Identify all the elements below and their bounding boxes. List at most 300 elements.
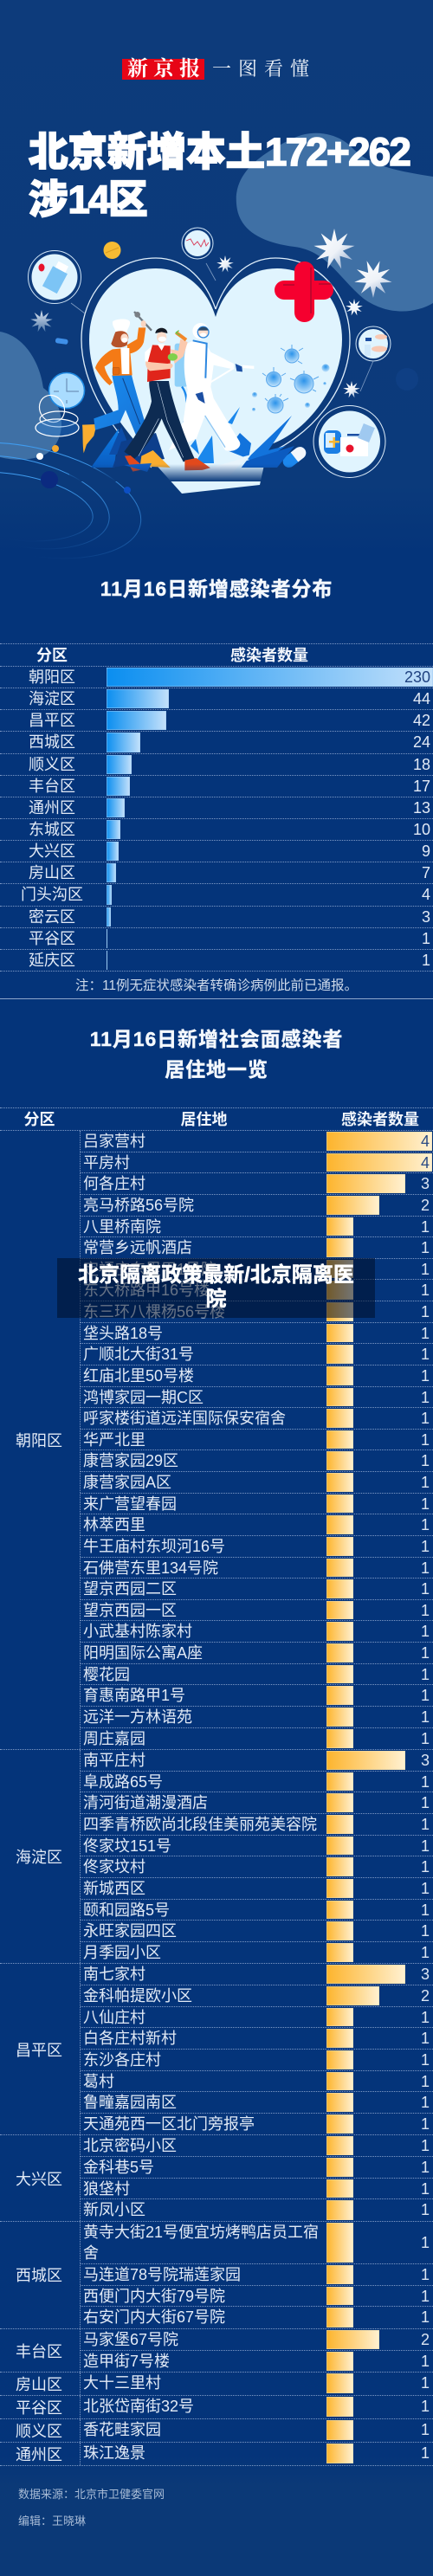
row: 马家堡67号院: 马家堡67号院	[83, 2331, 178, 2348]
orbit lines	[0, 423, 152, 578]
row: 马家堡67号院: 2	[421, 2331, 430, 2348]
connector line	[360, 361, 373, 391]
row: 顺义区: 18	[413, 756, 430, 773]
overlay title band	[57, 1258, 375, 1318]
row: 四季青桥欧尚北段佳美丽苑美容院	[81, 1814, 433, 1836]
row: 望京西园二区: 1	[421, 1580, 430, 1598]
row: 房山区	[0, 862, 433, 884]
row: 东城区	[0, 819, 433, 841]
row: 来广营望春园	[81, 1494, 433, 1514]
row: 亮马桥路56号院: 亮马桥路56号院	[83, 1197, 194, 1214]
row: 呼家楼街道远洋国际保安宿舍: 1	[421, 1410, 430, 1427]
row: 新城西区: 新城西区	[83, 1880, 145, 1897]
group: 海淀区: 海淀区	[16, 1849, 62, 1866]
row: 东城区: 东城区	[29, 821, 75, 838]
row: 石佛营东里134号院: 1	[421, 1559, 430, 1576]
row: 葛村: 葛村	[83, 2073, 114, 2090]
row: 大十三里村: 1	[421, 2374, 430, 2392]
heading: residence list: 居住地一览	[165, 1058, 268, 1081]
row: 平房村	[81, 1152, 433, 1173]
icon: heartbeat circle	[182, 228, 213, 259]
row: 东大桥路甲16号楼: 1	[421, 1282, 430, 1299]
row: 永旺家园四区	[81, 1921, 433, 1942]
row: 南平庄村	[81, 1750, 433, 1772]
row: 南七家村: 3	[421, 1966, 430, 1983]
row: 颐和园路5号	[81, 1900, 433, 1921]
row: 八仙庄村: 八仙庄村	[83, 2009, 145, 2026]
group: 朝阳区: 朝阳区	[16, 1432, 62, 1449]
row: 新凤小区	[83, 2200, 430, 2220]
row: 望京西园二区: 望京西园二区	[83, 1580, 177, 1598]
row: 红庙北里50号楼: 红庙北里50号楼	[83, 1367, 194, 1385]
shards at base	[124, 457, 247, 478]
row: 海淀区: 44	[413, 690, 430, 707]
row: 密云区: 密云区	[29, 908, 75, 926]
heading: residence list: 11月16日新增社会面感染者	[90, 1028, 343, 1050]
row: 亮马桥路56号院: 2	[421, 1197, 430, 1214]
row: 密云区	[0, 907, 433, 928]
row: 佟家坟村	[81, 1856, 433, 1878]
row: 八仙庄村: 1	[421, 2009, 430, 2026]
viruses	[252, 345, 329, 413]
row: 白各庄村新村	[81, 2028, 433, 2050]
row: 门头沟区: 4	[422, 886, 430, 903]
table header: 分区	[36, 647, 68, 664]
red cross	[275, 261, 333, 322]
row: 周庄嘉园: 周庄嘉园	[83, 1730, 145, 1747]
row: 广顺北大街31号: 广顺北大街31号	[83, 1346, 194, 1363]
row: 望京西园二区	[81, 1579, 433, 1600]
row: 育惠南路甲1号: 育惠南路甲1号	[83, 1687, 185, 1704]
row: 牛王庙村东坝河16号: 牛王庙村东坝河16号	[83, 1538, 225, 1555]
icon: tablet circle	[28, 251, 81, 303]
row: 呼家楼街道远洋国际保安宿舍: 呼家楼街道远洋国际保安宿舍	[83, 1410, 286, 1427]
row: 新凤小区: 新凤小区	[83, 2201, 145, 2218]
icon: star big	[313, 229, 355, 269]
row: 鸿博家园一期C区	[81, 1387, 433, 1408]
row: 阳明国际公寓A座: 1	[421, 1644, 430, 1662]
row: 垡头路18号: 1	[421, 1325, 430, 1342]
group: 平谷区: 平谷区	[16, 2399, 62, 2417]
row: 北京密码小区: 北京密码小区	[83, 2137, 177, 2154]
row: 小武基村陈家村	[81, 1621, 433, 1643]
row: 佟家坟151号: 1	[421, 1837, 430, 1855]
main title	[28, 130, 410, 222]
heading: infection distribution: 11月16日新增感染者分布	[100, 578, 333, 600]
row: 远洋一方林语苑	[81, 1707, 433, 1728]
icon: capsule	[281, 444, 308, 470]
row: 昌平区	[0, 710, 433, 732]
heart fill	[89, 268, 342, 494]
row: 海淀区: 海淀区	[29, 690, 75, 707]
row: 平房村: 4	[421, 1154, 430, 1172]
note: 注：11例无症状感染者转确诊病例此前已通报。	[75, 978, 358, 993]
row: 华严北里	[81, 1430, 433, 1450]
row: 清河街道潮漫酒店	[81, 1792, 433, 1814]
row: 珠江逸景: 珠江逸景	[83, 2444, 145, 2462]
row: 马连道78号院瑞莲家园: 马连道78号院瑞莲家园	[83, 2266, 241, 2283]
row: 来广营望春园: 来广营望春园	[83, 1495, 177, 1513]
row: 白各庄村新村: 白各庄村新村	[83, 2030, 177, 2047]
row: 红庙北里50号楼	[81, 1365, 433, 1387]
row: 金科巷5号	[81, 2157, 433, 2179]
row: 石佛营东里134号院: 石佛营东里134号院	[83, 1559, 218, 1576]
icon: mask ring	[35, 391, 79, 436]
row: 朝阳区	[0, 667, 433, 688]
connector line	[71, 303, 85, 313]
row: 林萃西里	[81, 1514, 433, 1536]
row: 造甲街7号楼: 1	[421, 2353, 430, 2370]
people group	[82, 312, 254, 472]
editor credit: 编辑：王晓琳	[18, 2515, 86, 2528]
row: 红庙北里50号楼: 1	[421, 1367, 430, 1385]
row: 远洋一方林语苑: 远洋一方林语苑	[83, 1708, 192, 1726]
table header: 居住地	[180, 1111, 227, 1128]
group: 朝阳区	[0, 1131, 433, 1750]
row: 南平庄村: 3	[421, 1752, 430, 1769]
main title: 涉14区	[29, 178, 148, 222]
row: 周庄嘉园	[83, 1729, 430, 1748]
row: 阳明国际公寓A座: 阳明国际公寓A座	[83, 1644, 203, 1662]
row: 鸿博家园一期C区: 1	[421, 1389, 430, 1406]
icon: star medium	[350, 255, 397, 302]
row: 育惠南路甲1号: 1	[421, 1687, 430, 1704]
row: 金科巷5号: 金科巷5号	[83, 2159, 154, 2176]
group: 顺义区: 顺义区	[16, 2423, 62, 2440]
group: 丰台区: 丰台区	[16, 2343, 62, 2360]
icon: bandage	[55, 338, 68, 345]
row: 造甲街7号楼	[83, 2352, 430, 2371]
row: 东大桥路甲16号楼: 东大桥路甲16号楼	[83, 1282, 210, 1299]
heading: residence list	[90, 1028, 343, 1081]
row: 樱花园: 1	[421, 1666, 430, 1683]
row: 樱花园	[81, 1664, 433, 1685]
row: 东三环八棵杨56号楼: 1	[421, 1303, 430, 1320]
row: 香花畦家园	[83, 2420, 430, 2440]
blob: top right	[236, 133, 433, 312]
row: 康营家园A区	[81, 1472, 433, 1494]
row: 南平庄村: 南平庄村	[83, 1752, 145, 1769]
group: 通州区: 通州区	[16, 2446, 62, 2463]
icon: medicine circle	[313, 405, 385, 478]
row: 八里桥南院	[81, 1216, 433, 1237]
row: 北京密码小区	[81, 2135, 433, 2157]
table header	[0, 643, 433, 667]
row: 大十三里村: 大十三里村	[83, 2374, 161, 2392]
row: 通州区: 通州区	[29, 799, 75, 817]
row: 东大桥路甲16号楼	[81, 1280, 433, 1301]
group: 丰台区	[0, 2329, 433, 2373]
note	[0, 972, 433, 999]
row: 康营家园A区: 康营家园A区	[83, 1474, 171, 1491]
row: 佟家坟村: 佟家坟村	[83, 1858, 145, 1876]
row: 金科帕提欧小区: 2	[421, 1987, 430, 2005]
group: 西城区: 西城区	[16, 2267, 62, 2284]
row: 小武基村陈家村: 1	[421, 1623, 430, 1640]
row: 天通苑西一区北门旁报亭: 天通苑西一区北门旁报亭	[83, 2115, 255, 2133]
row: 阜成路65号: 1	[421, 1773, 430, 1791]
row: 石佛营东里134号院	[81, 1557, 433, 1579]
table header: 分区	[24, 1111, 55, 1128]
row: 南七家村: 南七家村	[83, 1966, 145, 1983]
icon: yellow pill	[104, 242, 121, 259]
row: 门头沟区	[0, 884, 433, 907]
row: 定福庄东里甲1号院: 1	[421, 1261, 430, 1278]
row: 北张岱南街32号: 北张岱南街32号	[83, 2398, 194, 2415]
row: 朝阳区: 朝阳区	[29, 668, 75, 686]
row: 东沙各庄村: 东沙各庄村	[83, 2051, 161, 2069]
row: 西便门内大街79号院: 西便门内大街79号院	[83, 2288, 225, 2305]
row: 平房村: 平房村	[83, 1154, 130, 1172]
row: 吕家营村: 4	[421, 1133, 430, 1150]
panel: residence table	[0, 1107, 433, 2466]
row: 狼垡村: 1	[421, 2180, 430, 2198]
row: 大十三里村	[83, 2373, 430, 2393]
row: 新凤小区: 1	[421, 2201, 430, 2218]
row: 康营家园29区: 1	[421, 1452, 430, 1469]
row: 右安门内大街67号院: 右安门内大街67号院	[83, 2308, 225, 2326]
row: 平谷区	[0, 928, 433, 950]
row: 西城区: 24	[413, 733, 430, 751]
group: 西城区	[0, 2222, 433, 2329]
row: 朝阳区: 230	[404, 668, 430, 686]
group: 大兴区: 大兴区	[16, 2171, 62, 2188]
row: 望京西园一区: 1	[421, 1602, 430, 1619]
row: 何各庄村: 3	[421, 1175, 430, 1192]
row: 顺义区	[0, 754, 433, 776]
row: 昌平区: 42	[413, 712, 430, 729]
row: 西城区	[0, 732, 433, 754]
row: 马连道78号院瑞莲家园: 1	[421, 2266, 430, 2283]
row: 月季园小区	[83, 1943, 430, 1962]
row: 清河街道潮漫酒店: 1	[421, 1794, 430, 1811]
row: 东沙各庄村: 1	[421, 2051, 430, 2069]
row: 亮马桥路56号院	[81, 1195, 433, 1216]
row: 葛村	[81, 2071, 433, 2092]
row: 延庆区	[0, 950, 433, 972]
row: 南七家村	[81, 1964, 433, 1985]
row: 望京西园一区	[81, 1600, 433, 1621]
row: 垡头路18号	[81, 1323, 433, 1344]
row: 来广营望春园: 1	[421, 1495, 430, 1513]
icon: star small right	[346, 299, 363, 315]
row: 马连道78号院瑞莲家园	[81, 2264, 433, 2286]
table header	[0, 1107, 433, 1131]
row: 华严北里: 华严北里	[83, 1431, 145, 1449]
row: 黄寺大街21号便宜坊烤鸭店员工宿舍: 黄寺大街21号便宜坊烤鸭店员工宿	[83, 2224, 319, 2241]
row: 清河街道潮漫酒店: 清河街道潮漫酒店	[83, 1794, 208, 1811]
panel: distribution table	[0, 643, 433, 999]
row: 樱花园: 樱花园	[83, 1666, 130, 1683]
row: 牛王庙村东坝河16号: 1	[421, 1538, 430, 1555]
heart outer ring	[81, 258, 350, 468]
row: 鲁疃嘉园南区: 1	[421, 2094, 430, 2111]
row: 门头沟区: 门头沟区	[21, 886, 83, 903]
group: 平谷区	[0, 2396, 433, 2419]
base fade	[69, 464, 294, 481]
row: 丰台区: 丰台区	[29, 778, 75, 795]
row: 阳明国际公寓A座	[81, 1643, 433, 1664]
row: 林萃西里: 林萃西里	[83, 1516, 145, 1533]
row: 丰台区	[0, 776, 433, 797]
row: 鲁疃嘉园南区	[81, 2092, 433, 2114]
row: 林萃西里: 1	[421, 1516, 430, 1533]
row: 顺义区: 顺义区	[29, 756, 75, 773]
row: 广顺北大街31号: 1	[421, 1346, 430, 1363]
row: 北京密码小区: 1	[421, 2137, 430, 2154]
row: 东城区: 10	[413, 821, 430, 838]
row: 黄寺大街21号便宜坊烤鸭店员工宿舍: 1	[421, 2234, 430, 2251]
row: 月季园小区: 1	[421, 1944, 430, 1961]
spikes at feet	[91, 407, 294, 472]
row: 金科帕提欧小区	[81, 1985, 433, 2007]
overlay title band: 北京隔离政策最新/北京隔离医院	[78, 1263, 354, 1311]
row: 葛村: 1	[421, 2073, 430, 2090]
row: 康营家园29区: 康营家园29区	[83, 1452, 178, 1469]
row: 平谷区: 1	[422, 930, 430, 947]
row: 天通苑西一区北门旁报亭	[83, 2114, 430, 2134]
row: 右安门内大街67号院: 1	[421, 2308, 430, 2326]
row: 香花畦家园: 1	[421, 2421, 430, 2438]
logo tagline: 一图看懂: 一图看懂	[212, 58, 316, 80]
row: 牛王庙村东坝河16号	[81, 1536, 433, 1557]
group: 大兴区	[0, 2135, 433, 2222]
row: 佟家坟151号: 佟家坟151号	[83, 1837, 171, 1855]
group: 房山区	[0, 2373, 433, 2396]
row: 延庆区: 1	[422, 952, 430, 969]
hero illustration	[0, 133, 433, 558]
row: 白各庄村新村: 1	[421, 2030, 430, 2047]
icon: star left	[30, 310, 53, 332]
row: 黄寺大街21号便宜坊烤鸭店员工宿舍: 舍	[83, 2244, 99, 2262]
row: 八里桥南院: 八里桥南院	[83, 1217, 161, 1235]
row: 小武基村陈家村: 小武基村陈家村	[83, 1623, 192, 1640]
row: 阜成路65号: 阜成路65号	[83, 1773, 163, 1791]
row: 延庆区: 延庆区	[29, 952, 75, 969]
row: 康营家园A区: 1	[421, 1474, 430, 1491]
icon: star near notch	[216, 255, 234, 272]
row: 金科巷5号: 1	[421, 2159, 430, 2176]
row: 珠江逸景: 1	[421, 2444, 430, 2462]
row: 常营乡远帆酒店: 1	[421, 1239, 430, 1256]
icon: hand washing circle	[356, 326, 391, 361]
icon: star lower right	[343, 381, 360, 397]
group: 海淀区	[0, 1750, 433, 1964]
row: 右安门内大街67号院	[83, 2308, 430, 2327]
row: 颐和园路5号: 1	[421, 1901, 430, 1919]
row: 永旺家园四区: 永旺家园四区	[83, 1922, 177, 1940]
row: 新城西区: 1	[421, 1880, 430, 1897]
row: 房山区: 7	[422, 864, 430, 881]
row: 海淀区	[0, 688, 433, 710]
row: 西便门内大街79号院	[81, 2286, 433, 2307]
row: 吕家营村	[81, 1131, 433, 1152]
person: doctor in protective suit	[169, 323, 254, 451]
row: 四季青桥欧尚北段佳美丽苑美容院: 四季青桥欧尚北段佳美丽苑美容院	[83, 1816, 317, 1833]
row: 北张岱南街32号	[83, 2397, 430, 2417]
table header: 感染者数量	[230, 647, 308, 664]
row: 八仙庄村	[81, 2007, 433, 2028]
row: 东三环八棵杨56号楼	[81, 1301, 433, 1323]
row: 东沙各庄村	[81, 2050, 433, 2071]
row: 大兴区: 9	[422, 843, 430, 860]
row: 珠江逸景	[83, 2444, 430, 2463]
group: 通州区	[0, 2443, 433, 2466]
row: 常营乡远帆酒店	[81, 1237, 433, 1259]
row: 房山区: 房山区	[29, 864, 75, 881]
row: 西便门内大街79号院: 1	[421, 2288, 430, 2305]
row: 黄寺大街21号便宜坊烤鸭店员工宿舍	[81, 2222, 433, 2264]
row: 佟家坟村: 1	[421, 1858, 430, 1876]
row: 何各庄村	[81, 1173, 433, 1195]
row: 呼家楼街道远洋国际保安宿舍	[81, 1408, 433, 1430]
row: 通州区	[0, 797, 433, 819]
row: 马家堡67号院	[81, 2329, 433, 2351]
row: 望京西园一区: 望京西园一区	[83, 1602, 177, 1619]
row: 北张岱南街32号: 1	[421, 2398, 430, 2415]
row: 通州区: 13	[413, 799, 430, 817]
row: 广顺北大街31号	[81, 1344, 433, 1365]
group: 顺义区	[0, 2419, 433, 2443]
row: 西城区: 西城区	[29, 733, 75, 751]
row: 垡头路18号: 垡头路18号	[83, 1325, 163, 1342]
row: 周庄嘉园: 1	[421, 1730, 430, 1747]
row: 造甲街7号楼: 造甲街7号楼	[83, 2353, 170, 2370]
row: 东三环八棵杨56号楼: 东三环八棵杨56号楼	[83, 1303, 225, 1320]
row: 天通苑西一区北门旁报亭: 1	[421, 2115, 430, 2133]
group: 昌平区: 昌平区	[16, 2042, 62, 2059]
row: 康营家园29区	[81, 1450, 433, 1472]
row: 狼垡村	[81, 2179, 433, 2199]
orbit dots	[36, 368, 418, 494]
row: 鸿博家园一期C区: 鸿博家园一期C区	[83, 1389, 204, 1406]
blob: bottom left	[0, 332, 61, 460]
row: 吕家营村: 吕家营村	[83, 1133, 145, 1150]
row: 华严北里: 1	[421, 1431, 430, 1449]
row: 定福庄东里甲1号院	[81, 1259, 433, 1280]
row: 八里桥南院: 1	[421, 1217, 430, 1235]
row: 平谷区: 平谷区	[29, 930, 75, 947]
row: 金科帕提欧小区: 金科帕提欧小区	[83, 1987, 192, 2005]
row: 颐和园路5号: 颐和园路5号	[83, 1901, 170, 1919]
row: 远洋一方林语苑: 1	[421, 1708, 430, 1726]
row: 何各庄村: 何各庄村	[83, 1175, 145, 1192]
person: man in red vest	[124, 328, 210, 472]
row: 阜成路65号	[81, 1772, 433, 1792]
row: 昌平区: 昌平区	[29, 712, 75, 729]
row: 定福庄东里甲1号院: 定福庄东里甲1号院	[83, 1261, 216, 1278]
group: 昌平区	[0, 1964, 433, 2135]
main title: 北京新增本土172+262	[29, 130, 410, 174]
connector line	[206, 263, 216, 281]
row: 新城西区	[81, 1878, 433, 1900]
icon: clock	[48, 372, 85, 409]
row: 密云区: 3	[422, 908, 430, 926]
row: 狼垡村: 狼垡村	[83, 2180, 130, 2198]
row: 大兴区: 大兴区	[29, 843, 75, 860]
row: 鲁疃嘉园南区: 鲁疃嘉园南区	[83, 2094, 177, 2111]
row: 佟家坟151号	[81, 1836, 433, 1856]
row: 月季园小区: 月季园小区	[83, 1944, 161, 1961]
person: chef woman	[82, 312, 171, 468]
row: 四季青桥欧尚北段佳美丽苑美容院: 1	[421, 1816, 430, 1833]
row: 常营乡远帆酒店: 常营乡远帆酒店	[83, 1239, 192, 1256]
row: 大兴区	[0, 841, 433, 862]
row: 丰台区: 17	[413, 778, 430, 795]
table header: 感染者数量	[341, 1111, 419, 1128]
group: 房山区: 房山区	[16, 2376, 62, 2393]
logo: 新京报: 新京报	[127, 58, 205, 81]
